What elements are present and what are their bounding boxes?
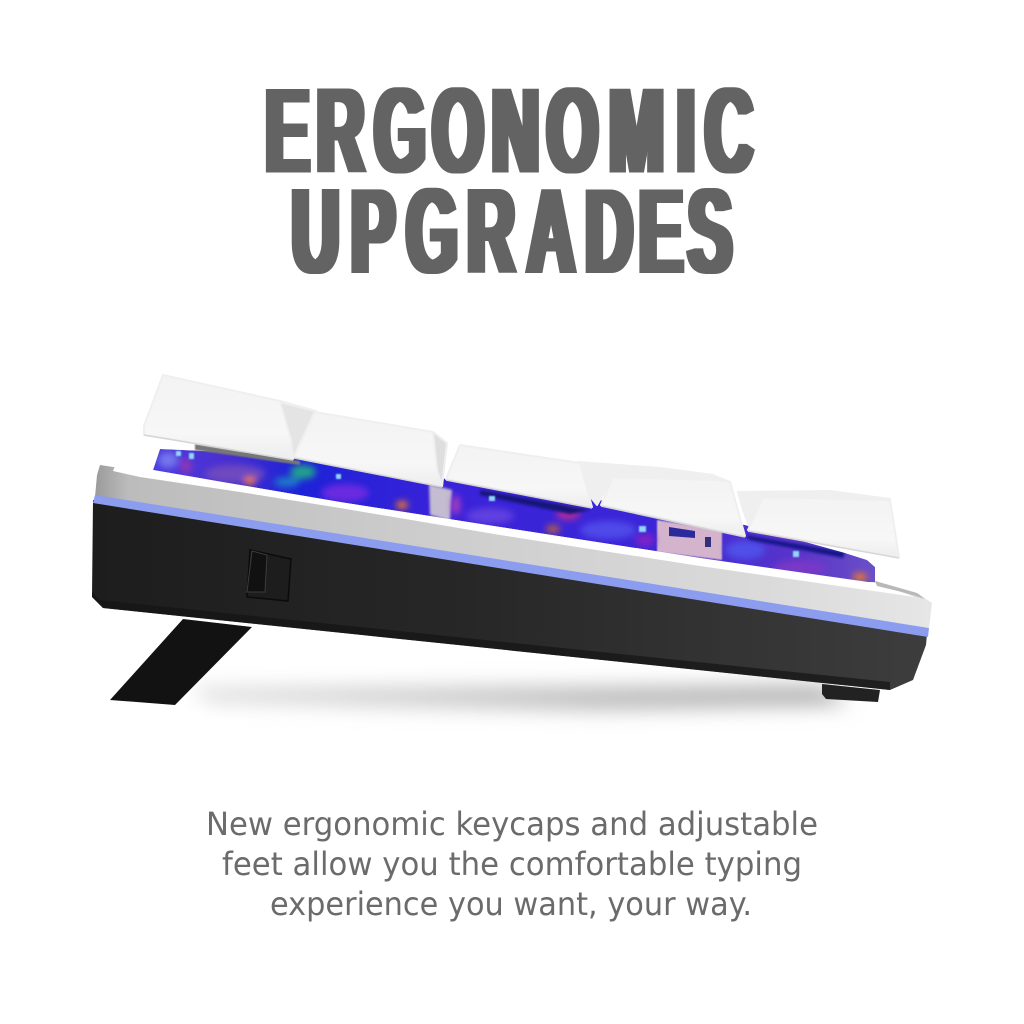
keycap bottom edges bbox=[144, 435, 899, 558]
keycap 3 bbox=[446, 445, 592, 507]
description line 2: feet allow you the comfortable typing bbox=[222, 845, 802, 883]
description text bbox=[206, 805, 818, 923]
blue LED strip bbox=[93, 495, 929, 637]
infographic canvas bbox=[92, 87, 932, 922]
keycap 1 bbox=[144, 375, 316, 459]
silver top plate bbox=[95, 465, 932, 628]
left pale block bbox=[158, 452, 178, 468]
violet patch 3 bbox=[466, 508, 514, 524]
orange glow 4 bbox=[853, 573, 867, 581]
white keycaps bbox=[144, 375, 899, 558]
orange glow 1 bbox=[244, 477, 256, 485]
navy shade under keycap 3 bbox=[480, 490, 590, 514]
ripple patch 4 bbox=[580, 521, 636, 539]
switch recess bbox=[247, 550, 291, 601]
rear keycap row 4 bbox=[578, 462, 730, 505]
profile switch bbox=[247, 550, 291, 601]
orange glow 2 bbox=[396, 501, 408, 509]
navy shade under keycap 5 bbox=[745, 535, 845, 558]
teal glow bbox=[274, 477, 300, 487]
title line 2: UPGRADES bbox=[292, 162, 732, 299]
pale board section bbox=[657, 520, 722, 560]
switch slider bbox=[247, 551, 267, 592]
dark detail slot bbox=[705, 537, 711, 547]
keycap 4 bbox=[601, 477, 745, 536]
keycap 2 bbox=[294, 412, 447, 486]
magenta edge bbox=[452, 495, 460, 515]
red-purple patch bbox=[180, 458, 192, 474]
plate highlight bbox=[113, 466, 915, 597]
switch band bbox=[153, 449, 875, 582]
kickstand foot bbox=[110, 619, 252, 705]
green glow bbox=[290, 465, 316, 479]
ripple patch 5 bbox=[725, 541, 765, 559]
violet patch 5 bbox=[774, 560, 826, 576]
violet patch 4 bbox=[635, 533, 655, 547]
switch glows bbox=[158, 452, 867, 581]
grey rear plate edge bbox=[875, 581, 925, 599]
orange glow 3 bbox=[546, 525, 560, 533]
keycap 2 side bbox=[433, 432, 447, 486]
description line 3: experience you want, your way. bbox=[270, 885, 752, 923]
title bbox=[266, 62, 753, 299]
description line 1: New ergonomic keycaps and adjustable bbox=[206, 805, 818, 843]
illuminated switches bbox=[153, 449, 875, 582]
keycap 5 bbox=[748, 497, 899, 557]
grey strip under keycap 1 bbox=[195, 444, 300, 465]
title line 1: ERGONOMIC bbox=[266, 62, 753, 199]
magenta glow bbox=[556, 508, 580, 520]
rear keycap row 5 bbox=[738, 491, 890, 528]
lower case bevel bbox=[92, 592, 890, 690]
light gap between switches bbox=[429, 484, 452, 521]
dark detail block bbox=[669, 527, 695, 538]
cyan highlights bbox=[176, 451, 799, 557]
violet patch 2 bbox=[321, 484, 369, 502]
black case body bbox=[92, 500, 927, 690]
keycap 1 side ribs bbox=[280, 402, 315, 458]
rear rubber foot bbox=[822, 684, 880, 702]
ground shadow bbox=[190, 686, 850, 710]
muted purple body bbox=[205, 465, 265, 483]
keyboard side view bbox=[92, 375, 932, 710]
